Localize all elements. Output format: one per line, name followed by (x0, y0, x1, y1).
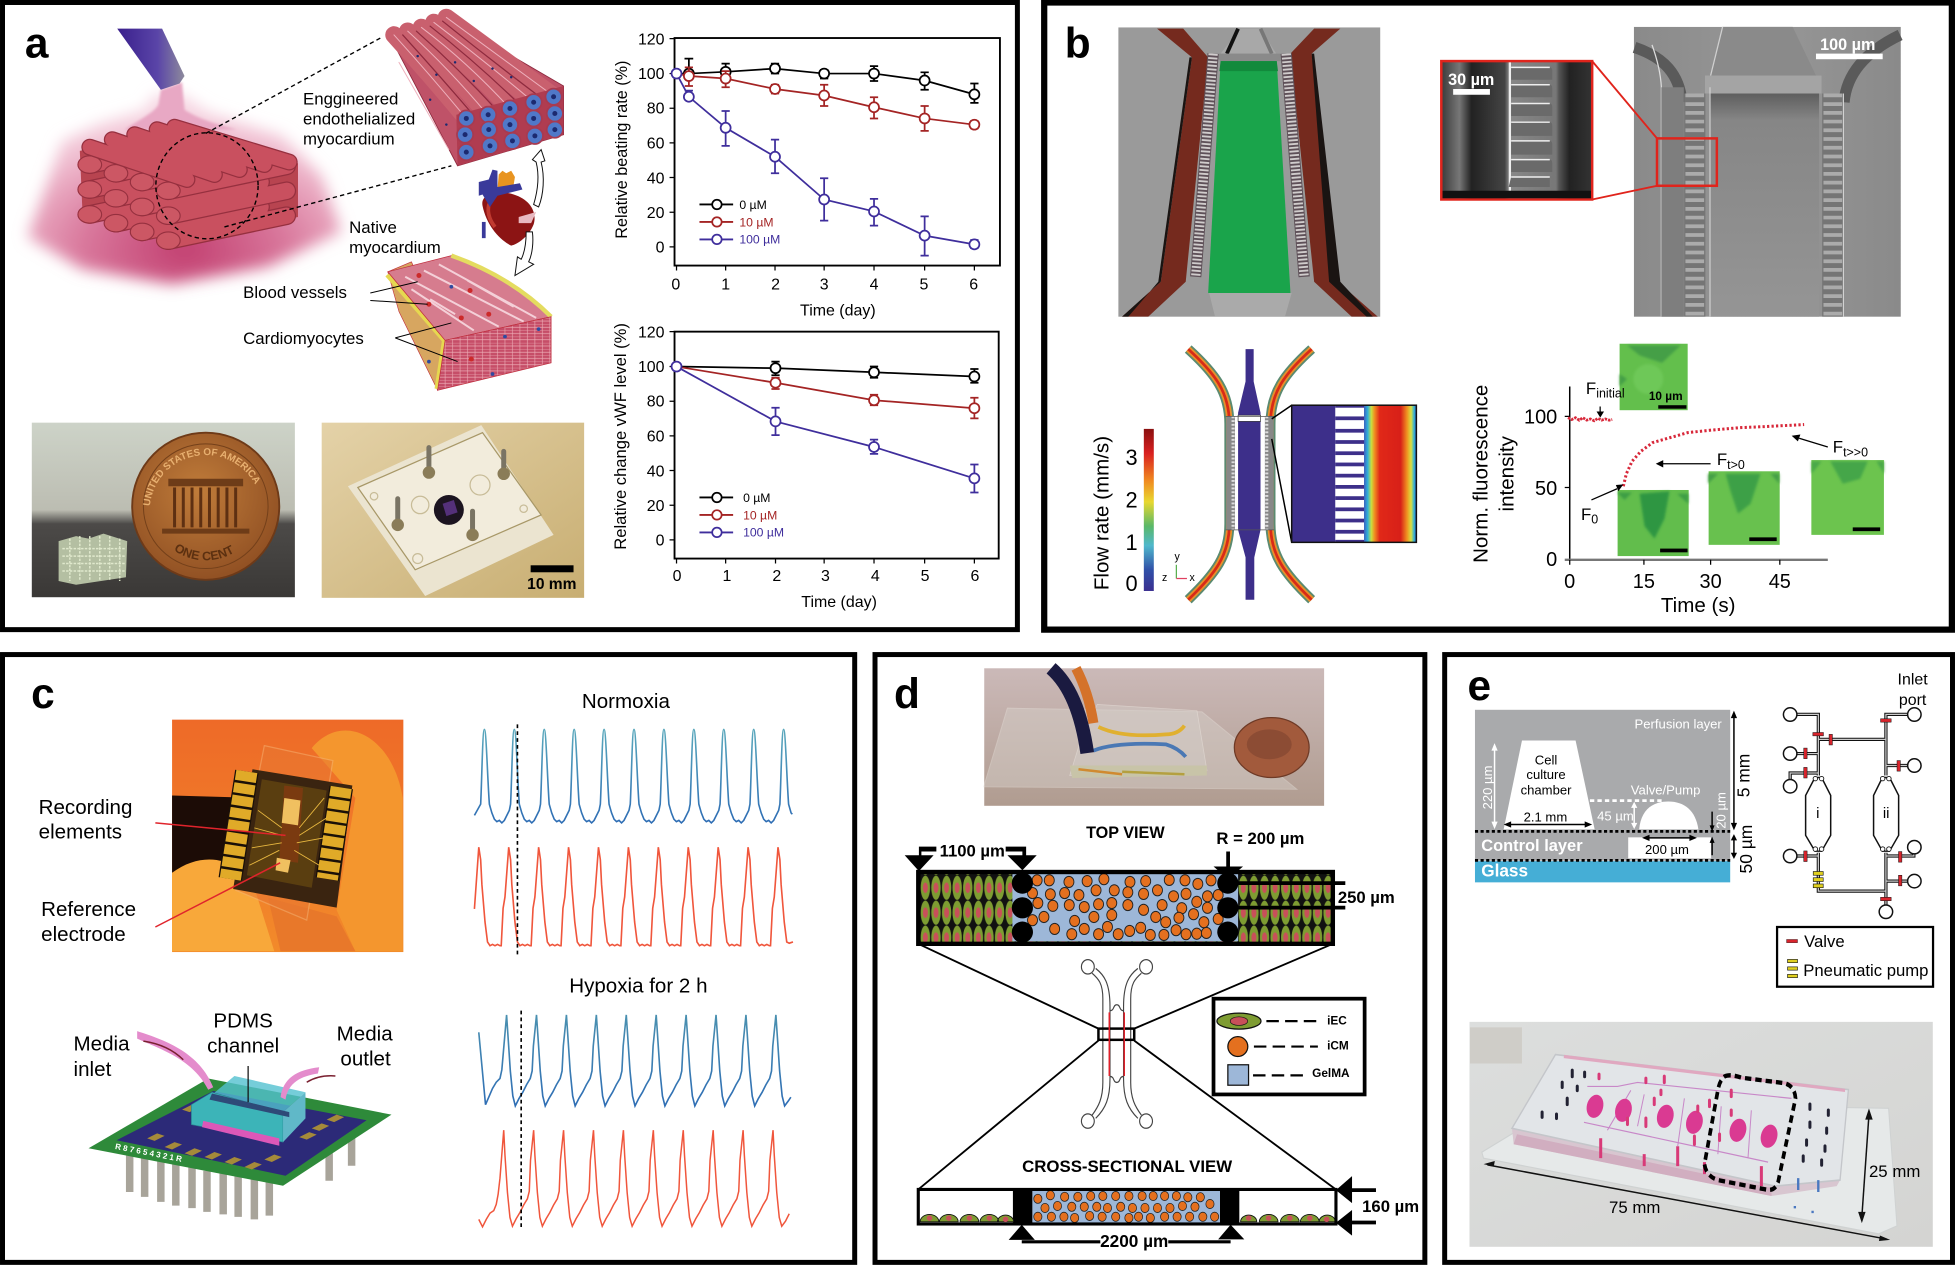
chart: relative change vWF level: 0 (656, 532, 665, 549)
annotations: fluorescence labels and arrows: F (1581, 505, 1591, 524)
photo: penny and printed scaffold (32, 422, 295, 598)
diagram: layered cross-section: 50 µm (1736, 825, 1756, 873)
legend: beating rate: 10 µM (739, 215, 774, 229)
illustration: microelectrode array device (89, 1031, 392, 1219)
chart: flow simulation (1188, 349, 1312, 600)
text: engineered myocardium label: myocardium (303, 130, 395, 149)
annotation: 160 µm dimension (1336, 1176, 1419, 1236)
series: 10 µM (677, 367, 979, 418)
legend: vWF: 10 µM (743, 508, 777, 522)
annotations: fluorescence labels and arrows: 0 (1591, 513, 1598, 527)
annotation: 2200 µm dimension (1009, 1225, 1244, 1251)
chart: relative beating rate (613, 31, 1000, 319)
heading: cross-sectional view: CROSS-SECTIONAL VIEW (1022, 1157, 1232, 1176)
legend: cell types (1214, 999, 1365, 1094)
chart: relative beating rate: 2 (771, 276, 780, 293)
photo: penny and printed scaffold: UNITED STATES OF AMERICA (143, 448, 260, 506)
chart: relative beating rate: 5 (919, 276, 928, 293)
text: recording elements label with pointer: elements (39, 820, 122, 843)
illustration: hydrogel neck below nozzle (125, 82, 237, 130)
annotation: 1100 µm dimension (905, 842, 1037, 871)
zoom lines from chip to views (918, 944, 1336, 1189)
chart: relative change vWF level: 5 (921, 568, 930, 585)
text: inlet port label: port (1899, 692, 1927, 709)
text: recording elements label with pointer (39, 796, 286, 843)
text: PDMS channel label: channel (207, 1034, 279, 1057)
diagram: layered cross-section: Glass (1481, 860, 1528, 880)
chart: relative beating rate: 40 (647, 170, 665, 187)
diagram: layered cross-section: Valve/Pump (1631, 783, 1700, 798)
trace: normoxia red (474, 847, 793, 946)
trace: hypoxia blue (479, 1015, 791, 1106)
chart: fluorescence recovery: 100 (1524, 406, 1557, 428)
panel d: iPSC cardiac chip (875, 655, 1425, 1262)
text: engineered myocardium label: endothelialized (303, 110, 415, 129)
photo: bioreactor chip with scale bar: 10 mm (527, 576, 577, 593)
legend: flow rate colour bar: 1 (1126, 530, 1138, 555)
chart: fluorescence recovery: 15 (1633, 571, 1655, 593)
photo: chip with tubing and penny (984, 668, 1324, 806)
annotations: fluorescence labels and arrows: t>0 (1727, 458, 1745, 472)
legend: beating rate: 100 µM (739, 233, 780, 247)
arrow: heart to engineered tissue (532, 150, 545, 207)
chart: relative beating rate: Time (day) (800, 302, 876, 319)
chart: relative beating rate: Relative beating rate (%) (613, 61, 631, 239)
annotation: 2200 µm dimension: 2200 µm (1100, 1231, 1168, 1251)
photo: bioreactor chip with scale bar (322, 423, 584, 598)
icon: axis triad: x (1189, 572, 1195, 584)
chart: relative change vWF level: 20 (647, 498, 665, 515)
diagram: layered cross-section: 20 µm (1714, 792, 1729, 829)
series: 100 µM (672, 362, 979, 492)
legend: valve and pump: Pneumatic pump (1803, 961, 1928, 980)
text: recording elements label with pointer: Recording (39, 796, 132, 819)
chart: relative beating rate: 4 (870, 276, 879, 293)
chart: relative change vWF level: 1 (722, 568, 731, 585)
heading: normoxia: Normoxia (582, 690, 670, 713)
diagram: layered cross-section: chamber (1521, 783, 1572, 798)
series: 10 µM (677, 67, 979, 131)
diagram: layered cross-section: 45 µm (1597, 808, 1634, 823)
diagram: layered cross-section: Cell (1535, 752, 1557, 767)
chart: relative beating rate: 6 (969, 276, 978, 293)
photo: penny and printed scaffold: ONE CENT (176, 544, 232, 560)
arrow: heart to native tissue (515, 232, 534, 276)
heading d: d (894, 670, 920, 717)
chart: relative beating rate: 100 (638, 66, 665, 83)
photo: fluorescence frame t>>0 (1811, 460, 1884, 535)
panel b: microfluidic cardiac tissue device (1044, 2, 1952, 630)
series: 0 µM (677, 59, 979, 103)
photo: flexible electrode chip in hand (172, 720, 403, 952)
chart: relative change vWF level: 4 (871, 568, 880, 585)
annotation: 250 µm (1238, 883, 1395, 908)
illustration: engineered endothelialized tissue (388, 16, 564, 166)
chart: relative beating rate: 1 (721, 276, 730, 293)
annotations: fluorescence labels and arrows: t>>0 (1843, 445, 1868, 459)
annotations: fluorescence labels and arrows: initial (1596, 387, 1625, 401)
icon: axis triad: z (1162, 572, 1167, 584)
legend: beating rate (699, 198, 780, 247)
legend: flow rate colour bar: 3 (1126, 445, 1138, 470)
text: engineered myocardium label: Enggineered (303, 90, 398, 109)
legend: vWF: 0 µM (743, 491, 770, 505)
legend: flow rate colour bar: Flow rate (mm/s) (1090, 436, 1113, 590)
heading b: b (1065, 19, 1091, 66)
series: 0 µM (677, 362, 979, 383)
arrow: 25 mm dimension: 25 mm (1869, 1162, 1920, 1181)
icon: heart (479, 170, 536, 246)
chart: fluorescence recovery (1469, 344, 1884, 617)
inset: SEM magnification (1441, 61, 1657, 199)
chart: fluorescence recovery: 0 (1564, 571, 1575, 593)
text: reference electrode label with pointer: electrode (41, 923, 126, 946)
photo: fluorescence frame t>0 (1708, 471, 1780, 545)
chart: relative change vWF level: 60 (647, 428, 665, 445)
chart: relative beating rate: 80 (647, 100, 665, 117)
annotation: 1100 µm dimension: 1100 µm (940, 842, 1005, 861)
legend: vWF (699, 491, 784, 540)
illustration: hydrogel cloud (27, 95, 342, 284)
diagram: layered cross-section: Perfusion layer (1635, 717, 1722, 732)
heading c: c (31, 670, 55, 717)
chart: relative beating rate: 120 (638, 31, 665, 48)
annotation: 250 µm: 250 µm (1338, 888, 1395, 907)
legend: vWF: 100 µM (743, 526, 784, 540)
legend: cell types: iEC (1327, 1014, 1347, 1028)
series: 100 µM (672, 69, 979, 256)
text: PDMS channel label: PDMS (213, 1009, 273, 1032)
diagram: layered cross-section: Control layer (1481, 837, 1583, 855)
text: inlet port label: Inlet (1898, 671, 1928, 688)
text: reference electrode label with pointer: Reference (41, 898, 136, 921)
legend: beating rate: 0 µM (739, 198, 767, 212)
trace: normoxia blue (474, 729, 792, 823)
chart: relative change vWF level (611, 323, 999, 611)
chart: fluorescence recovery: 50 (1535, 478, 1557, 500)
heading e: e (1467, 662, 1491, 709)
annotations: fluorescence labels and arrows: F (1586, 379, 1596, 398)
text: media inlet label: inlet (74, 1058, 112, 1081)
inset: velocity field zoom (1272, 405, 1416, 542)
diagram: chip outline (1081, 960, 1152, 1128)
diagram: layered cross-section: culture (1526, 767, 1566, 782)
diagram: valve and chamber schematic (1783, 708, 1921, 919)
dashed selection circle with zoom lines (156, 37, 451, 239)
chart: relative change vWF level: Relative change vWF level (%) (611, 323, 630, 550)
photo: fluorescence frame initial: 10 µm (1649, 389, 1683, 403)
panel c: electrode array recordings (3, 655, 855, 1262)
chart: relative change vWF level: 2 (772, 568, 781, 585)
chart: fluorescence recovery: 45 (1769, 571, 1791, 593)
text: reference electrode label with pointer (41, 863, 280, 946)
chart: fluorescence recovery: Norm. fluorescence (1469, 385, 1492, 563)
illustration: 3D device render (1118, 27, 1380, 317)
legend: flow rate colour bar: 2 (1126, 487, 1138, 512)
photo: SEM of the device (1634, 27, 1901, 317)
heading: hypoxia: Hypoxia for 2 h (569, 974, 708, 997)
text: cardiomyocytes label with leaders (243, 323, 458, 362)
arrow: 75 mm dimension: 75 mm (1609, 1198, 1660, 1217)
diagram: layered cross-section (1475, 710, 1756, 882)
arrow: 75 mm dimension (1484, 1161, 1890, 1241)
annotations: fluorescence labels and arrows (1581, 379, 1868, 527)
diagram: top view of tissue chamber (918, 872, 1333, 944)
icon: axis triad (1162, 551, 1195, 584)
illustration: microelectrode array device: R 8 7 6 5 4 3 2 1 R (114, 1142, 183, 1164)
legend: flow rate colour bar (1090, 429, 1154, 596)
text: media inlet label: Media (74, 1033, 130, 1056)
divider: hypoxia time marker (520, 1011, 522, 1230)
inset: SEM magnification: 30 µm (1448, 71, 1494, 89)
chart: relative change vWF level: 100 (638, 359, 665, 376)
chart: relative change vWF level: 6 (971, 568, 980, 585)
chart: relative change vWF level: 0 (673, 568, 682, 585)
legend: flow rate colour bar: 0 (1126, 571, 1138, 596)
text: blood vessels label with leaders: Blood vessels (243, 283, 347, 302)
text: native myocardium label: Native (349, 218, 397, 237)
diagram: valve and chamber schematic: i (1816, 805, 1820, 822)
chart: fluorescence recovery: 30 (1700, 571, 1722, 593)
photo: fluorescence frame F0 (1617, 490, 1689, 556)
diagram: layered cross-section: 220 µm (1480, 765, 1495, 809)
illustration: chip on hand (230, 746, 352, 920)
chart: fluorescence recovery: Time (s) (1661, 594, 1735, 617)
chart: relative change vWF level: 3 (821, 568, 830, 585)
panel e: multi-organ pneumatic chip (1445, 655, 1952, 1262)
chart: relative beating rate: 20 (647, 205, 665, 222)
photo: fluorescence frame initial (1620, 344, 1688, 410)
tube: media outlet (281, 1067, 319, 1100)
diagram: valve and chamber schematic: ii (1883, 805, 1889, 822)
chart: relative change vWF level: 80 (647, 393, 665, 410)
chart: relative change vWF level: 120 (638, 324, 665, 341)
chart: fluorescence recovery: intensity (1496, 435, 1519, 512)
legend: cell types: GelMA (1312, 1066, 1350, 1080)
chart: relative beating rate: 3 (820, 276, 829, 293)
arrow: 25 mm dimension (1858, 1108, 1920, 1223)
annotation: 160 µm dimension: 160 µm (1362, 1197, 1419, 1216)
text: media outlet label: Media (337, 1023, 393, 1046)
icon: axis triad: y (1174, 551, 1180, 563)
diagram: layered cross-section: 5 mm (1733, 754, 1753, 797)
diagram: cross-section (918, 1189, 1336, 1224)
chart: relative change vWF level: Time (day) (801, 594, 877, 611)
diagram: layered cross-section: 200 µm (1645, 842, 1689, 857)
icon: print nozzle (117, 29, 185, 90)
chart: fluorescence recovery: 0 (1546, 549, 1557, 571)
annotation: R = 200 µm: R = 200 µm (1216, 829, 1304, 848)
text: media outlet label: outlet (340, 1048, 391, 1071)
heading a: a (25, 19, 49, 66)
chart: relative beating rate: 60 (647, 135, 665, 152)
annotations: fluorescence labels and arrows: F (1717, 450, 1727, 469)
diagram: layered cross-section: 2.1 mm (1524, 810, 1567, 825)
photo: SEM of the device: 100 µm (1820, 36, 1875, 54)
tube: media inlet (137, 1031, 213, 1090)
panel a: 3D bioprinted myocardium (0, 0, 1020, 632)
text: native myocardium label: myocardium (349, 238, 441, 257)
trace: hypoxia red (479, 1130, 789, 1227)
chart: relative beating rate: 0 (656, 239, 665, 256)
legend: cell types: iCM (1327, 1038, 1349, 1052)
chart: relative beating rate: 0 (671, 276, 680, 293)
legend: valve and pump: Valve (1804, 932, 1845, 951)
illustration: printed log-pile scaffold (78, 127, 298, 249)
text: blood vessels label with leaders (243, 282, 428, 304)
divider: normoxia time marker (516, 724, 518, 957)
heading: top view: TOP VIEW (1086, 824, 1165, 842)
annotation: R = 200 µm (1214, 829, 1304, 879)
illustration: native myocardium block (388, 256, 551, 390)
photo: chip with dimensions (1469, 1022, 1933, 1247)
chart: relative change vWF level: 40 (647, 463, 665, 480)
legend: valve and pump (1777, 927, 1933, 987)
text: cardiomyocytes label with leaders: Cardiomyocytes (243, 329, 364, 348)
annotations: fluorescence labels and arrows: F (1833, 438, 1843, 457)
